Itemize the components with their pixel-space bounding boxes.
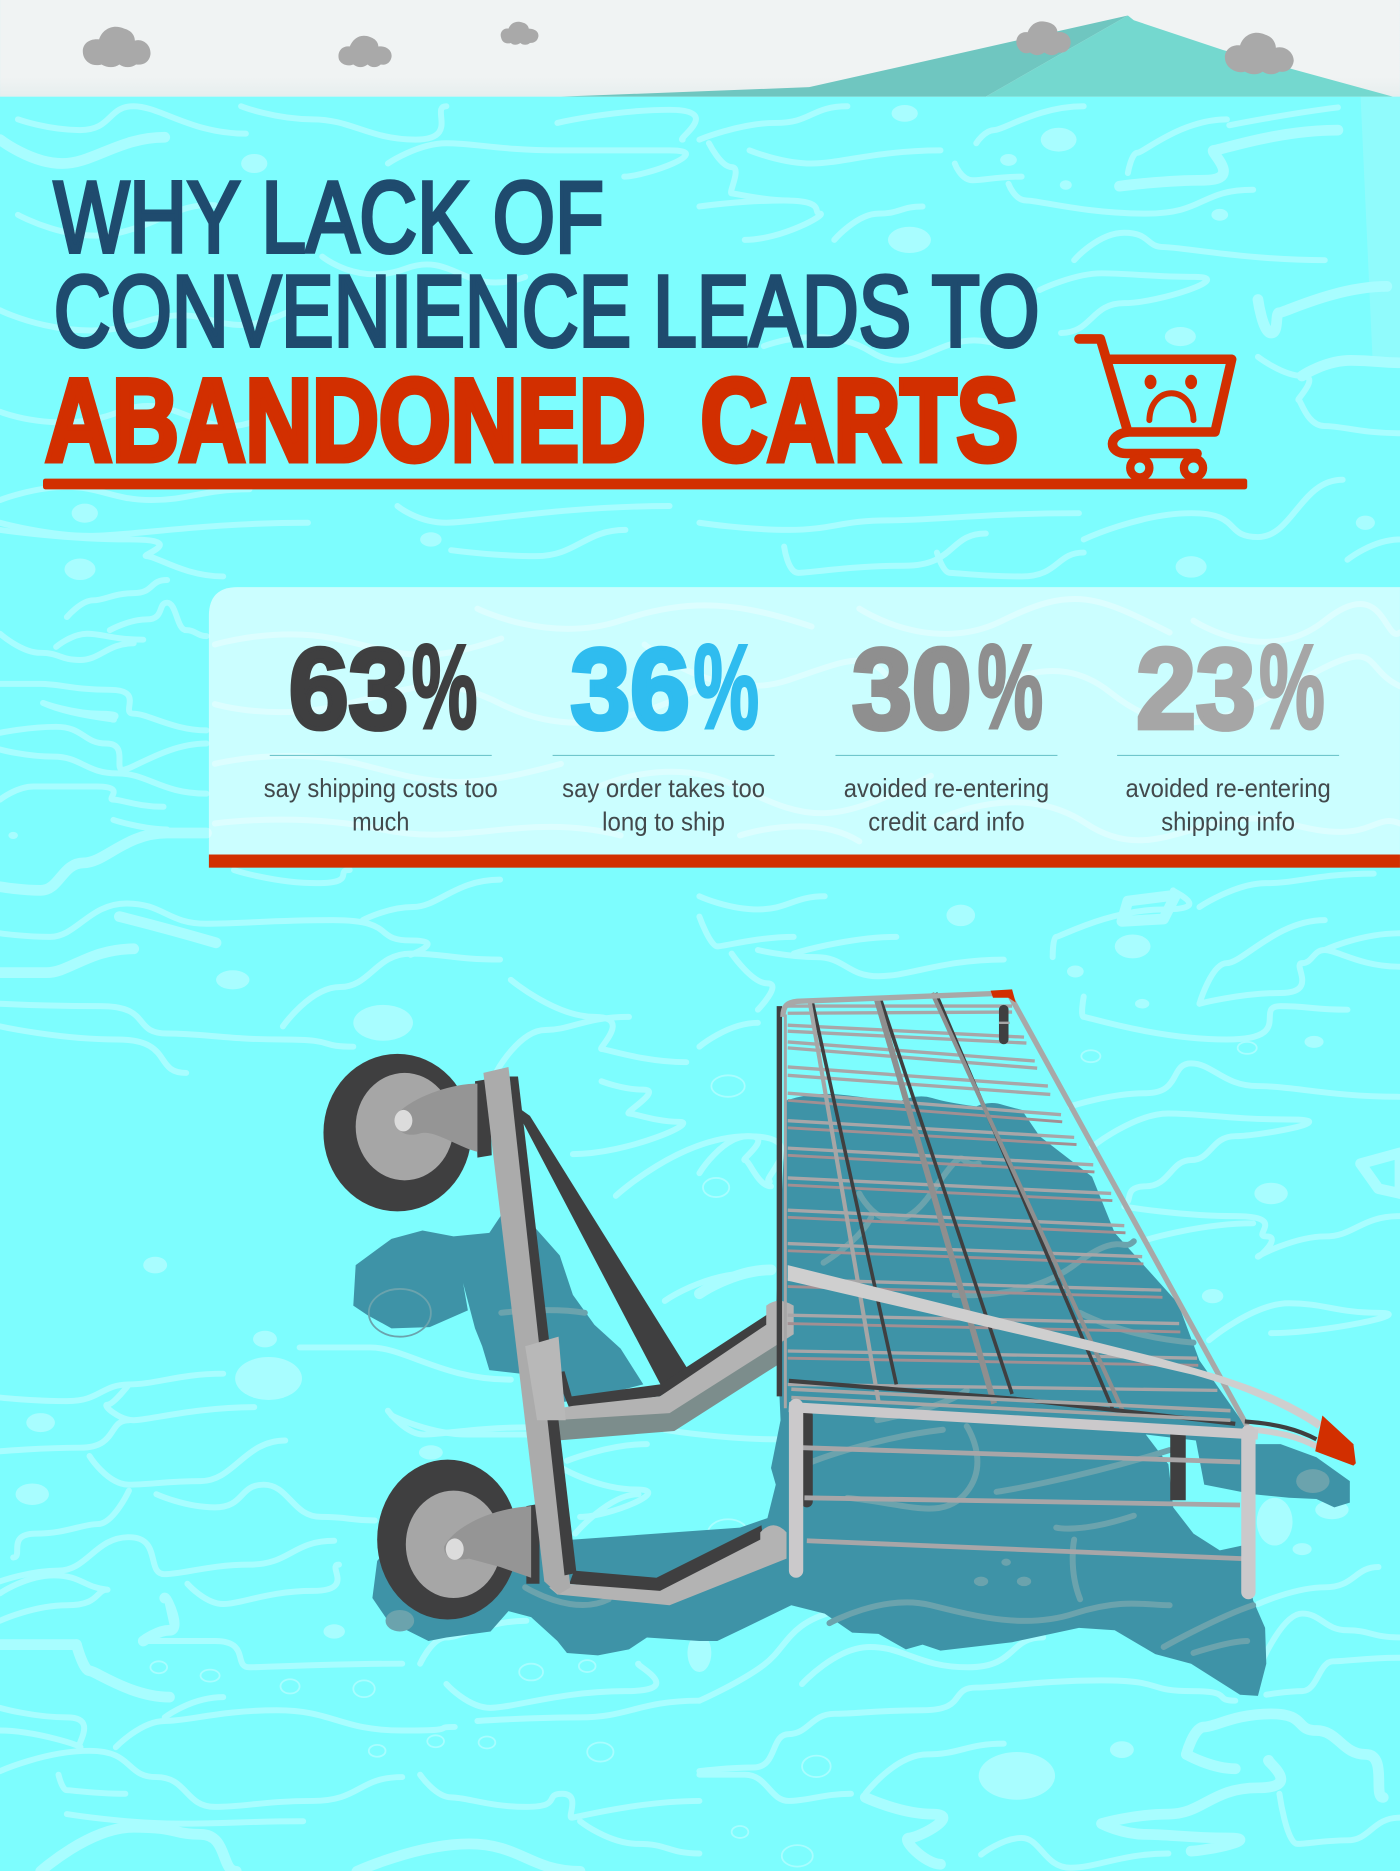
stat: 36% (553, 621, 775, 837)
stat: 30%: 30 (852, 625, 972, 753)
title line 1: WHY LACK OF (54, 161, 604, 274)
title (45, 161, 1040, 486)
clouds (83, 21, 1294, 74)
mountain (561, 16, 1393, 97)
shopping cart illustration (323, 989, 1356, 1696)
title line 3: CARTS (701, 355, 1018, 486)
stat: 36%: 36 (571, 625, 690, 753)
stat: 63%: much (352, 807, 409, 837)
stat: 23%: % (1259, 621, 1325, 754)
stat: 30%: credit card info (868, 807, 1025, 837)
cart shadow (353, 1094, 1350, 1696)
icon: sad shopping cart (1079, 339, 1232, 477)
shadow ripples (501, 1158, 1253, 1653)
stat: 30%: avoided re-entering (844, 773, 1049, 803)
stat: 36%: % (693, 621, 759, 754)
stat: 23%: 23 (1136, 625, 1256, 753)
stat: 23% (1117, 621, 1339, 837)
stat: 63%: say shipping costs too (264, 773, 498, 803)
lower rack (789, 1406, 1258, 1592)
panel red bar (209, 855, 1400, 868)
title line 2: CONVENIENCE LEADS TO (54, 255, 1040, 368)
title line 3: ABANDONED (45, 355, 646, 486)
title underline (43, 479, 1247, 489)
panel: statistics (209, 587, 1400, 868)
upper wheel (323, 1054, 492, 1211)
stat: 23%: shipping info (1161, 807, 1295, 837)
stat: 63%: % (412, 621, 477, 754)
stat: 30% (835, 621, 1057, 837)
stat: 23%: avoided re-entering (1125, 773, 1331, 803)
stat: 63%: 63 (289, 625, 408, 753)
frame braces (513, 1104, 794, 1605)
frame post (483, 1067, 576, 1594)
diagonal bar and handle (788, 1265, 1356, 1466)
stat: 30%: % (977, 621, 1043, 754)
lower wheel (377, 1460, 539, 1620)
basket wires (779, 989, 1247, 1426)
sky band (0, 0, 1400, 97)
stat: 36%: say order takes too (562, 773, 765, 803)
stat: 63% (264, 621, 498, 837)
stat: 36%: long to ship (602, 807, 725, 837)
